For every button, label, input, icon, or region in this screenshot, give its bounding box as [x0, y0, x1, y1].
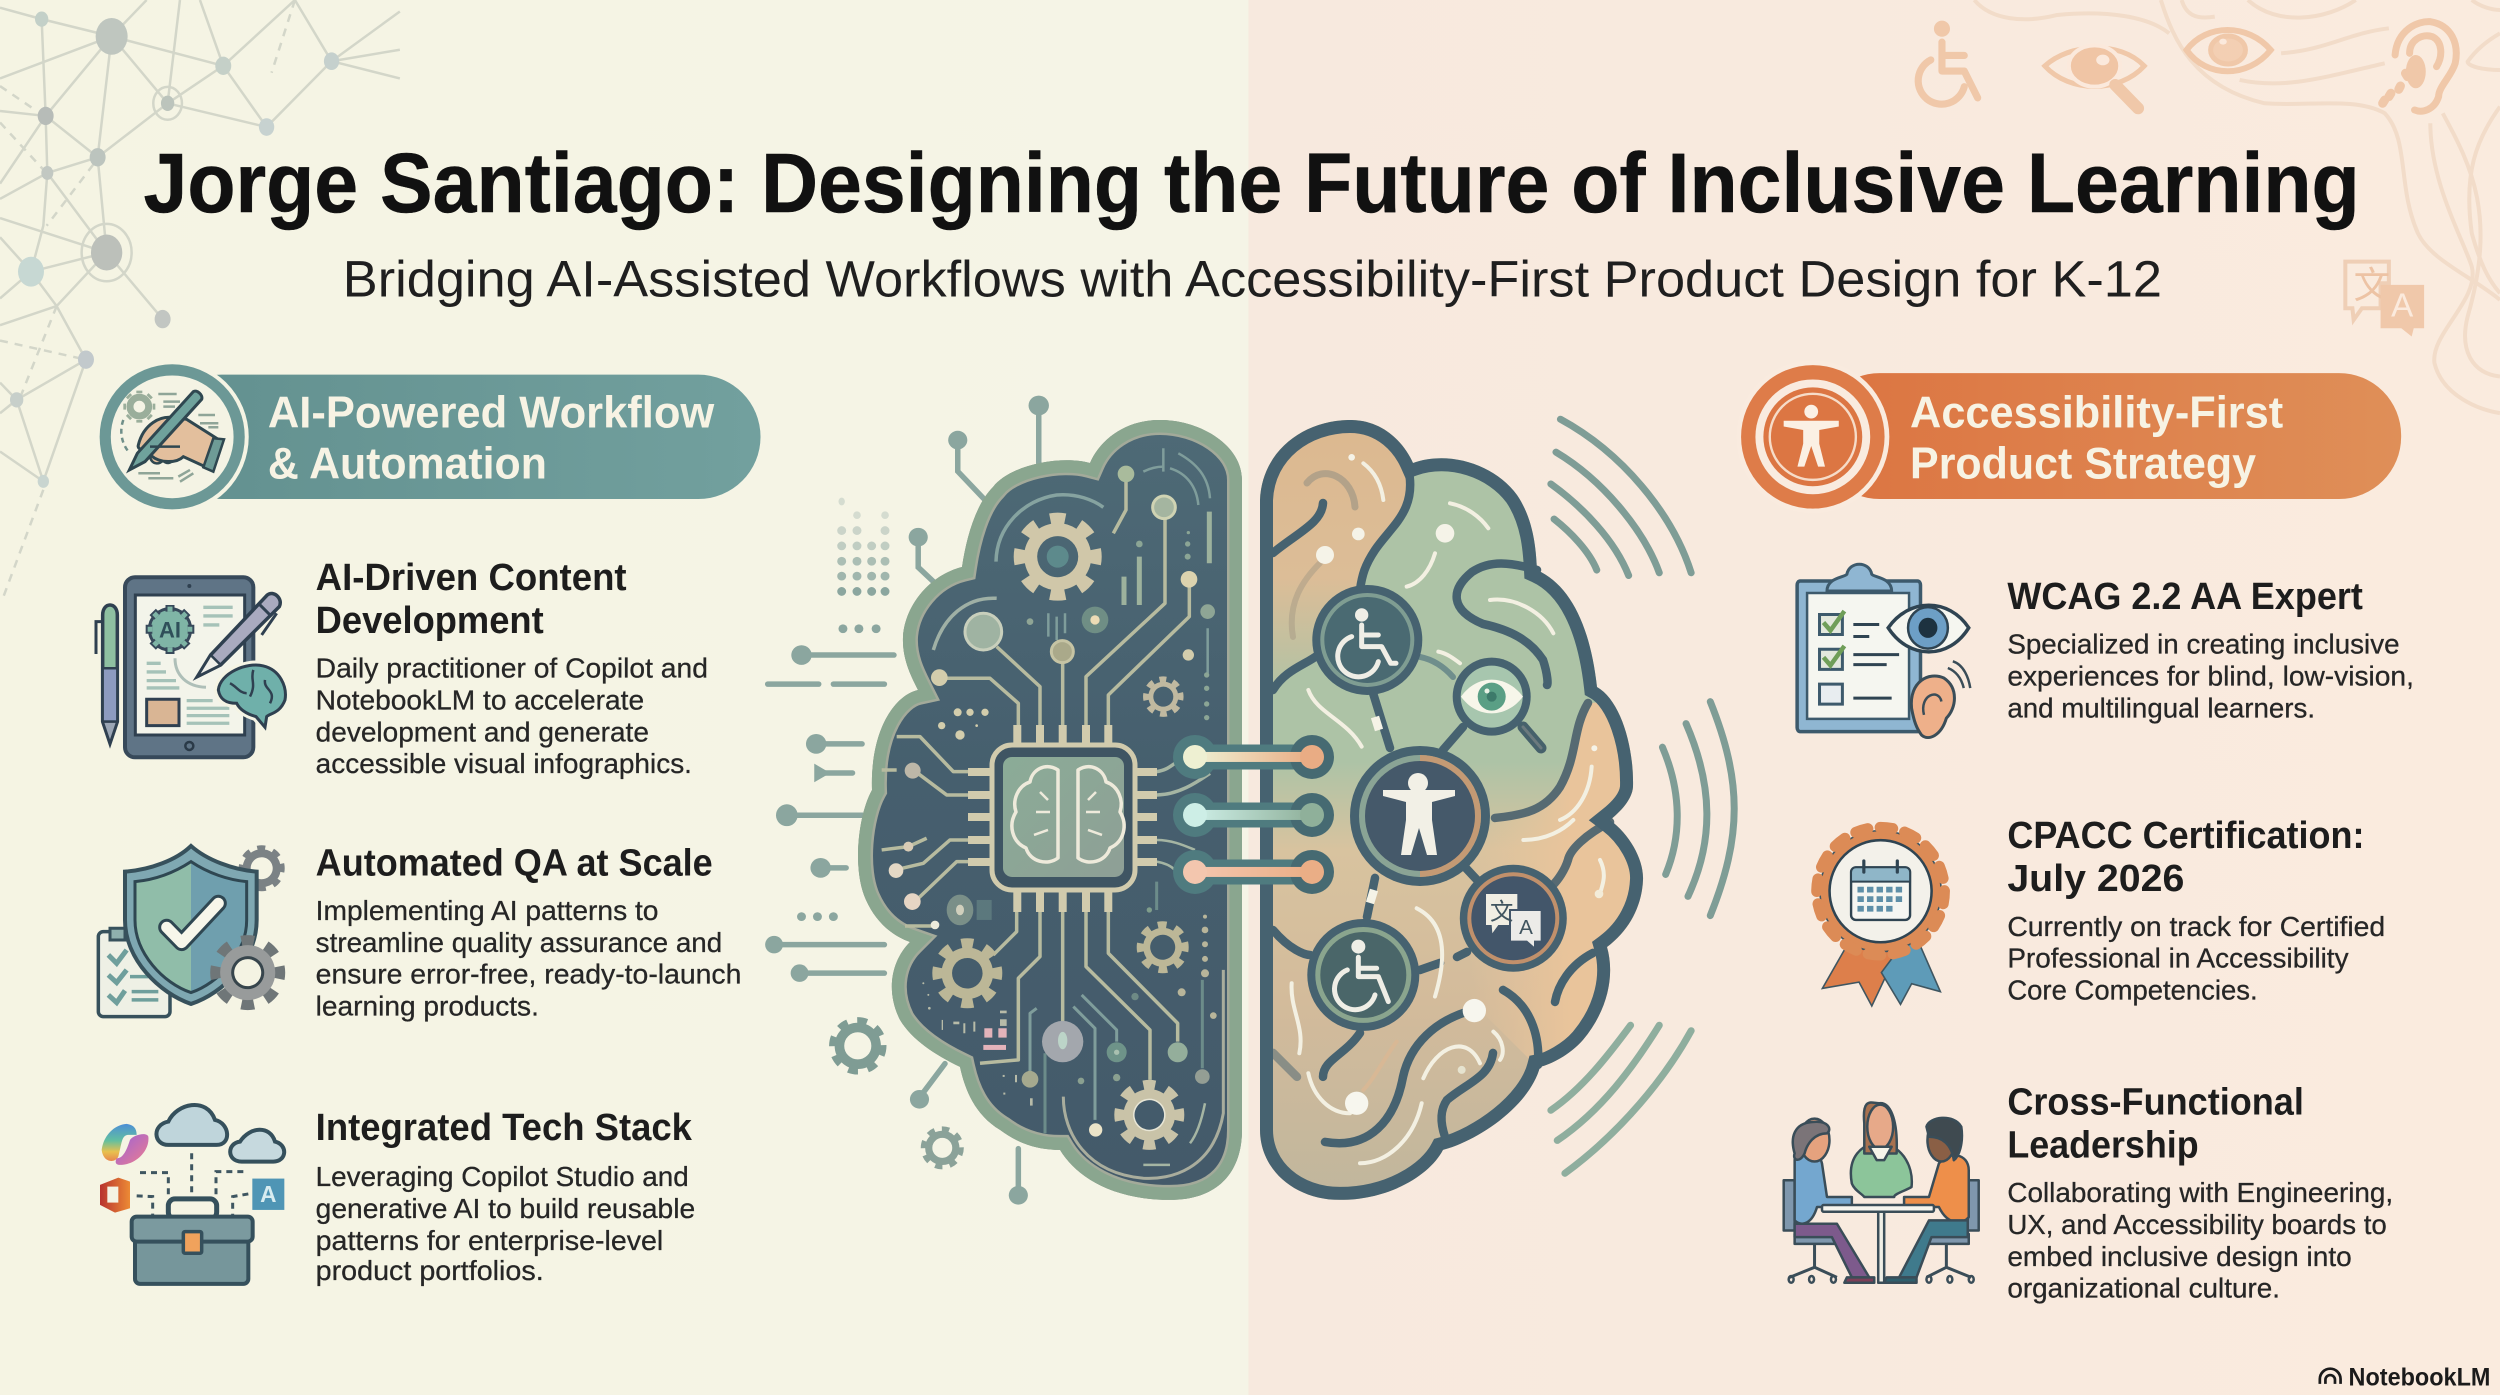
hemisphere folds	[1273, 467, 1610, 1143]
brain: left circuit hemisphere	[858, 420, 1242, 1200]
ribbons	[1822, 933, 1897, 1006]
brain: right organic hemisphere	[1250, 410, 1650, 1210]
heading text: Accessibility-First	[1910, 388, 2283, 437]
node: wheelchair lower	[1307, 919, 1419, 1031]
gear: lower right	[1136, 921, 1189, 974]
text block: WCAG 2.2 AA Expert: Specialized in creating inclusive	[2007, 629, 2400, 660]
node: translate bubbles: 文	[1490, 898, 1513, 924]
text block: Automated QA at Scale: learning products.	[316, 991, 539, 1022]
icon: faded translate bubbles: A	[2391, 287, 2414, 325]
node: accessibility person centre	[1350, 746, 1490, 886]
decorative flowing lines: top-right corner	[1974, 0, 2500, 413]
text block: CPACC Certification	[2007, 814, 2385, 1006]
icon: faded eye	[2187, 30, 2271, 71]
text block: Automated QA at Scale	[316, 841, 741, 1022]
text block: Automated QA at Scale: streamline quality assurance and	[316, 927, 722, 958]
connector bars between hemispheres	[1173, 735, 1334, 894]
text block: Automated QA at Scale: Automated QA at Scale	[316, 841, 713, 884]
text block: Automated QA at Scale: ensure error-free, ready-to-launch	[316, 959, 741, 990]
text block: CPACC Certification: Core Competencies.	[2007, 975, 2258, 1006]
highlights	[1308, 454, 1597, 820]
microchip pins	[968, 725, 1157, 912]
text block: Cross-Functional Leadership: Collaborating with Engineering,	[2007, 1177, 2393, 1208]
text block: Integrated Tech Stack: product portfolios.	[316, 1255, 544, 1286]
text block: Cross-Functional Leadership: Cross-Functional	[2007, 1080, 2304, 1123]
icon: shield with check, gears and clipboard	[98, 845, 285, 1017]
gear: upper right	[1143, 676, 1184, 717]
text block: WCAG 2.2 AA Expert: experiences for blind, low-vision,	[2007, 661, 2414, 692]
icon: three people at a table	[1784, 1103, 1979, 1283]
text block: WCAG 2.2 AA Expert	[2007, 575, 2414, 723]
text block: Integrated Tech Stack: patterns for enterprise-level	[316, 1225, 663, 1256]
icon: hand with stylus	[121, 391, 224, 482]
node: magnified eye	[1453, 658, 1541, 748]
text block: WCAG 2.2 AA Expert: WCAG 2.2 AA Expert	[2007, 575, 2363, 618]
panel header: AI-Powered Workflow & Automation	[96, 360, 761, 513]
gear: outside bottom	[924, 1130, 961, 1166]
gear: bottom	[1114, 1080, 1185, 1150]
icon: tablet with AI and pens	[96, 577, 285, 757]
mini brain on chip	[1012, 767, 1124, 862]
text block: AI-Driven Content Development: accessible visual infographics.	[316, 748, 692, 779]
gear: outside lower left	[833, 1021, 882, 1071]
text block: Integrated Tech Stack: generative AI to build reusable	[316, 1193, 695, 1224]
decorative network: top-left corner	[0, 0, 400, 597]
icon: faded eye with magnifier	[2045, 45, 2144, 108]
gear: lower left	[932, 938, 1003, 1009]
panel header: AI-Powered Workflow & Automation: & Automation	[268, 439, 547, 488]
icon: faded ear	[2383, 22, 2456, 111]
icon: tablet with AI and pens: AI	[159, 617, 181, 642]
text block: AI-Driven Content Development: Development	[316, 599, 544, 642]
panel header: Accessibility-First Product Strategy	[1736, 360, 2401, 513]
icon: faded translate bubbles: 文	[2354, 265, 2390, 306]
text block: WCAG 2.2 AA Expert: and multilingual learners.	[2007, 692, 2315, 723]
icon: faded translate bubbles	[2345, 262, 2424, 337]
circuit traces: lower half	[882, 838, 1223, 1178]
node: wheelchair upper	[1312, 585, 1422, 695]
microchip body	[992, 745, 1135, 890]
node: translate bubbles	[1460, 865, 1567, 972]
text block: AI-Driven Content Development	[316, 556, 708, 779]
title: Jorge Santiago: Designing the Future of Inclusive Learning	[143, 136, 2360, 230]
text block: Automated QA at Scale: Implementing AI patterns to	[316, 895, 658, 926]
node: translate bubbles: A	[1519, 916, 1533, 939]
icon: toolbox with clouds and app logos: A	[260, 1181, 277, 1207]
text block: Cross-Functional Leadership: UX, and Accessibility boards to	[2007, 1209, 2387, 1240]
text block: Cross-Functional Leadership: organizational culture.	[2007, 1273, 2280, 1304]
NotebookLM watermark: NotebookLM	[2349, 1364, 2490, 1391]
panel header: Accessibility-First Product Strategy: Product Strategy	[1910, 439, 2256, 488]
text block: Integrated Tech Stack: Integrated Tech Stack	[316, 1106, 693, 1149]
icon: accessibility person	[1784, 405, 1839, 467]
text block: Cross-Functional Leadership: Leadership	[2007, 1123, 2199, 1166]
text block: AI-Driven Content Development: AI-Driven Content	[316, 556, 627, 599]
icon: certification badge with calendar	[1817, 827, 1944, 1006]
icon: toolbox with clouds and app logos	[100, 1105, 284, 1284]
text block: CPACC Certification: CPACC Certification:	[2007, 814, 2364, 857]
heading text: AI-Powered Workflow	[268, 388, 715, 437]
text block: Cross-Functional Leadership	[2007, 1080, 2393, 1304]
text block: CPACC Certification: Professional in Accessibility	[2007, 943, 2349, 974]
gear: upper large	[1012, 511, 1103, 602]
decorative marks left of brain	[765, 396, 1049, 1205]
text block: AI-Driven Content Development: development and generate	[316, 716, 649, 747]
text block: Integrated Tech Stack: Leveraging Copilot Studio and	[316, 1161, 689, 1192]
gear bottom	[210, 935, 285, 1010]
sound wave arcs	[1551, 419, 1734, 1173]
text block: CPACC Certification: Currently on track for Certified	[2007, 911, 2385, 942]
ear-like grey strokes	[1292, 474, 1355, 637]
gear top	[238, 845, 285, 892]
text block: AI-Driven Content Development: Daily practitioner of Copilot and	[316, 653, 708, 684]
text block: Cross-Functional Leadership: embed inclusive design into	[2007, 1241, 2352, 1272]
text block: CPACC Certification: July 2026	[2007, 857, 2184, 900]
circuit traces: upper half	[882, 448, 1215, 795]
icon: faded wheelchair	[1918, 21, 1978, 104]
subtitle: Bridging AI-Assisted Workflows with Accessibility-First Product Design for K-12	[343, 251, 2162, 308]
text block: Integrated Tech Stack	[316, 1106, 695, 1286]
text block: AI-Driven Content Development: NotebookLM to accelerate	[316, 684, 644, 715]
icon: clipboard with eye and ear	[1797, 564, 1970, 738]
